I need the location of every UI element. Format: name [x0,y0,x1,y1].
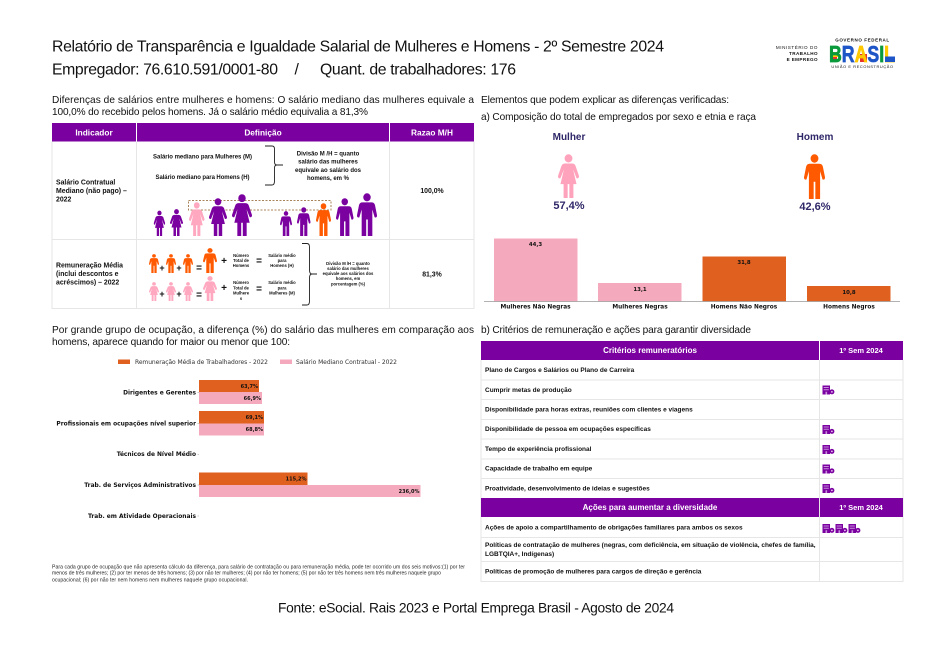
chart legend: Salário Mediano Contratual - 2022 [296,359,397,366]
woman share: 57,4% [553,200,585,212]
row 2 men formula: = [256,256,262,267]
row 2 women formula: = [256,284,262,295]
criteria header: 1º Sem 2024 [839,346,884,355]
occupation group text [52,325,474,348]
table header: Razao M/H [411,128,453,138]
row 2 women formula: + [221,283,227,294]
footnote: Para cada grupo de ocupação que não apresenta cálculo da diferença, para salário de contratação ou para remuneração média, pode ter ocorrido um dos seis motivos:(1) por ter [52,564,465,570]
row 2 women formula: Mulheres (M) [269,290,296,296]
row 2 men formula: + [221,256,227,267]
title: Quant. de trabalhadores: 176 [320,62,516,78]
row 2 women formula: Salário médio [268,280,296,285]
row 1 definition texts [153,146,362,185]
title: Relatório de Transparência e Igualdade Salarial de Mulheres e Homens - 2º Semestre 2024 [52,38,664,56]
row 2 men formula: Homens [233,263,250,268]
occupation group text: Por grande grupo de ocupação, a diferença (%) do salário das mulheres em comparação aos [52,325,474,336]
right section heading b: b) Critérios de remuneração e ações para garantir diversidade [481,325,751,336]
right heading: explaining elements: a) Composição do total de empregados por sexo e etnia e raça [481,112,756,123]
row 2 men formula [149,248,296,274]
bar chart: difference by occupation [56,380,420,520]
row 1 ratio: 100,0% [420,188,444,195]
chart legend [118,359,397,366]
diversity rows: Políticas de contratação de mulheres (negras, com deficiência, em situação de violência, chefes de família, [485,542,816,549]
bar chart: difference by occupation: 69,1% [246,415,263,421]
row 1 median illustration: people [154,193,377,236]
chart legend: Remuneração Média de Trabalhadores - 2022 [135,359,268,366]
right heading: explaining elements: Elementos que podem explicar as diferenças verificadas: [481,95,729,106]
bar chart: difference by occupation: 115,2% [286,476,306,482]
row 2 men formula: = [196,263,202,274]
bar chart: difference by occupation: 66,9% [244,396,261,402]
logo: Ministério do Trabalho e Emprego / Governo Federal Brasil: UNIÃO E RECONSTRUÇÃO [831,64,894,69]
row 1 indicator: 2022 [56,196,71,204]
row 2 women formula: Número [233,280,249,285]
row 2 bracket and explanation [302,244,374,305]
row 2 bracket and explanation: Divisão M /H = quanto [326,261,370,266]
criteria rows [485,367,693,492]
bar chart: difference by occupation: Profissionais em ocupações nível superior [56,420,196,428]
criteria rows: Proatividade, desenvolvimento de ideias e sugestões [485,486,650,492]
criteria markers [822,386,834,493]
row 2 women formula: Total de [233,286,250,290]
bar chart: composition by sex and race: 13,1 [633,287,647,293]
row 2 women formula: s [240,296,243,301]
table header: Definição [244,128,282,138]
logo: Ministério do Trabalho e Emprego / Governo Federal Brasil [776,38,895,69]
row 1 definition texts: Divisão M /H = quanto [297,152,360,158]
footnote: ocupacional; (6) por não ter nem homens nem mulheres naquele grupo ocupacional. [52,578,248,584]
row 2 men formula: Número [233,253,249,258]
row 2 women formula [149,276,296,301]
diversity header: 1º Sem 2024 [839,503,884,512]
diversity rows: LGBTQIA+, Indígenas) [485,551,554,558]
woman share [553,132,585,212]
row 2 ratio: 81,3% [422,272,442,278]
row 2 bracket and explanation: homens, em [336,276,360,281]
row 1 definition texts: Salário mediano para Mulheres (M) [153,154,252,160]
bar chart: difference by occupation: Trab. de Serviços Administrativos [84,483,196,489]
row 2 bracket and explanation: porcentagem (%) [331,282,366,286]
bar chart: composition by sex and race: Homens Não Negros [711,304,778,310]
diversity rows: Políticas de promoção de mulheres para cargos de direção e gerência [485,568,702,576]
title [52,38,664,78]
bar chart: difference by occupation: Trab. em Atividade Operacionais [88,514,196,520]
row 2 men formula: Homens (H) [270,263,294,268]
panel: remuneration criteria and diversity actions table [481,341,903,582]
intro text: differences in salaries: 100,0% do recebido pelos homens. Já o salário médio equivalia a 81,3% [52,107,368,118]
footnote: menos de três mulheres; (2) por ter menos de três homens; (3) por não ter mulheres; (4) por não ter homens; (5) por não ter três homens nem três mulheres naquele grupo [52,570,441,576]
bar chart: composition by sex and race [484,238,900,310]
criteria header: Critérios remuneratórios [603,346,697,355]
man share: 42,6% [799,201,831,213]
bar chart: composition by sex and race: 10,8 [842,290,856,296]
title: Empregador: 76.610.591/0001-80 [52,62,278,78]
woman share: Mulher [553,132,585,143]
logo: Ministério do Trabalho e Emprego / Governo Federal Brasil: E EMPREGO [787,57,818,62]
bar chart: difference by occupation: 68,8% [246,427,263,433]
row 1 definition texts: homens, em % [307,176,350,182]
bar chart: difference by occupation: 63,7% [241,384,258,390]
diversity rows [485,524,816,576]
criteria rows: Plano de Cargos e Salários ou Plano de Carreira [485,367,635,374]
row 2 indicator: (inclui descontos e [56,271,119,278]
man share: Homem [797,132,833,143]
row 2 women formula: + [176,289,182,299]
title: / [294,62,300,78]
row 1 indicator: Salário Contratual [56,180,115,186]
row 1 definition texts: Salário mediano para Homens (H) [156,175,250,181]
row 2 bracket and explanation: salário das mulheres [327,266,369,271]
intro text: differences in salaries [52,95,474,118]
criteria rows: Capacidade de trabalho em equipe [485,466,593,472]
bar chart: composition by sex and race: Mulheres Não Negras [500,304,571,310]
criteria rows: Cumprir metas de produção [485,387,572,394]
row 2 men formula: Salário médio [268,253,296,258]
panel: indicator table [52,123,474,308]
row 2 men formula: para [278,258,287,263]
man share [797,132,833,213]
logo: Ministério do Trabalho e Emprego / Governo Federal Brasil: GOVERNO FEDERAL [835,38,890,42]
source footer: Fonte: eSocial. Rais 2023 e Portal Emprega Brasil - Agosto de 2024 [278,600,674,616]
row 1 definition texts: salário das mulheres [298,160,359,166]
criteria rows: Disponibilidade de pessoa em ocupações específicas [485,426,651,433]
row 1 indicator: Mediano (não pago) – [56,188,127,195]
right heading: explaining elements [481,95,756,123]
diversity header: Ações para aumentar a diversidade [583,503,718,512]
logo: Ministério do Trabalho e Emprego / Governo Federal Brasil: MINISTÉRIO DO [776,44,818,50]
bar chart: composition by sex and race: 44,3 [529,242,542,248]
row 1 indicator [56,180,127,204]
diversity markers [822,524,860,533]
criteria header [481,341,903,360]
intro text: differences in salaries: Diferenças de salários entre mulheres e homens: O salário mediano das mulheres equivale a [52,95,474,106]
criteria rows: Disponibilidade para horas extras, reuniões com clientes e viagens [485,406,693,414]
row 2 men formula: + [176,263,182,273]
diversity header [481,498,903,517]
row 1 definition texts: equivale ao salário dos [295,168,362,174]
logo: Ministério do Trabalho e Emprego / Governo Federal Brasil: TRABALHO [789,51,818,56]
bar chart: composition by sex and race: Homens Negros [823,304,875,310]
row 2 indicator: Remuneração Média [56,262,123,270]
bar chart: difference by occupation: Dirigentes e Gerentes [123,390,196,396]
bar chart: composition by sex and race: Mulheres Negras [612,304,668,310]
criteria rows: Tempo de experiência profissional [485,446,592,453]
row 2 indicator [56,262,123,286]
bar chart: difference by occupation: Técnicos de Nível Médio [117,451,196,458]
row 2 men formula: + [159,263,165,273]
occupation group text: homens, aparece quando for maior ou menor que 100: [52,337,290,348]
bar chart: difference by occupation: 236,0% [399,489,420,495]
table header: Indicador [75,128,113,138]
footnote [52,564,465,584]
row 2 women formula: Mulhere [233,290,250,296]
row 2 women formula: = [196,290,202,301]
row 2 bracket and explanation: equivale aos salários dos [323,271,374,276]
table header [52,123,474,142]
bar chart: composition by sex and race: 31,8 [737,260,751,266]
row 2 women formula: para [278,286,287,290]
row 2 men formula: Total de [233,258,250,263]
diversity rows: Ações de apoio a compartilhamento de obrigações familiares para ambos os sexos [485,524,743,532]
row 2 women formula: + [159,289,165,299]
row 2 indicator: acréscimos) – 2022 [56,280,119,286]
logo: Ministério do Trabalho e Emprego / Governo Federal Brasil: BRASIL [829,41,895,67]
